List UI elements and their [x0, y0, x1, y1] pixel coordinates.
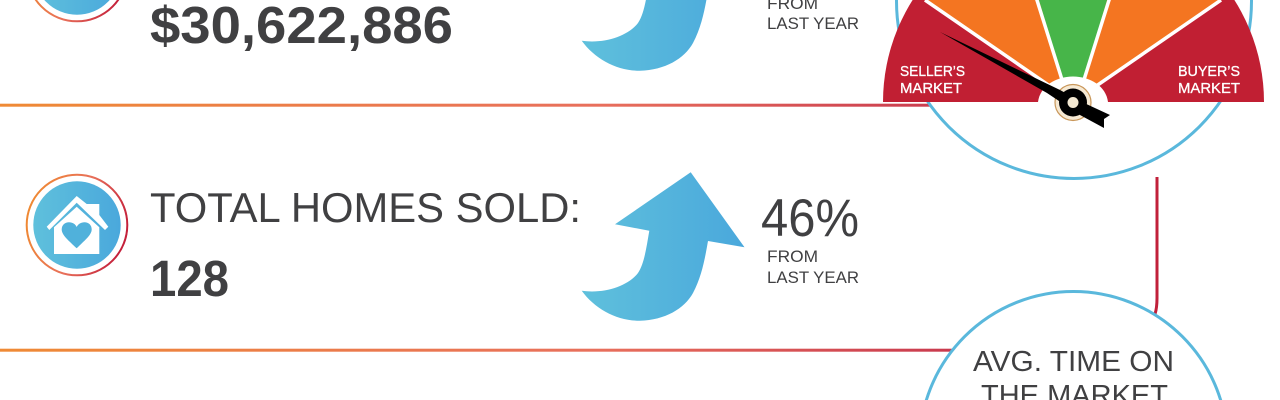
- arrow: sales volume up: [582, 0, 706, 71]
- heading: total homes sold label: TOTAL HOMES SOLD:: [150, 184, 581, 231]
- connector: gauge to time on market: [1155, 177, 1157, 314]
- gauge white hub: [1038, 76, 1108, 102]
- label: seller's market: MARKET: [900, 80, 962, 97]
- panel: market gauge: [883, 0, 1264, 178]
- label: buyer's market: [1179, 66, 1240, 94]
- label: seller's market: [900, 66, 965, 94]
- text: average time on market heading: AVG. TIME ON: [973, 346, 1174, 378]
- heading: total homes sold value: 128: [150, 250, 229, 307]
- label: buyer's market: BUYER’S: [1178, 63, 1240, 80]
- house body glyph: [54, 207, 99, 254]
- icon: sales volume badge: [34, 0, 120, 22]
- heart glyph: [62, 222, 92, 248]
- divider: upper row rule: [0, 104, 932, 107]
- arrow: homes sold up: [582, 172, 744, 321]
- roof glyph: [47, 196, 108, 230]
- gauge orange sectors: [928, 0, 1218, 84]
- panel: average time on market: [920, 292, 1228, 400]
- gauge white dividers: [924, 0, 1222, 86]
- text: homes sold from last year: [767, 247, 859, 287]
- gauge green sector: [1039, 0, 1107, 78]
- text: average time on market heading: [973, 346, 1174, 400]
- label: buyer's market: MARKET: [1178, 80, 1240, 97]
- gauge needle: [940, 32, 1110, 128]
- text: sales volume from last year: LAST YEAR: [767, 14, 859, 33]
- divider: lower row rule: [0, 349, 956, 352]
- gauge red sector: [883, 0, 1264, 102]
- stat: homes sold change: 46%: [761, 189, 859, 248]
- icon: homes sold badge: [27, 175, 127, 275]
- gauge outer circle: [896, 0, 1252, 178]
- text: homes sold from last year: FROM: [767, 247, 818, 266]
- text: sales volume from last year: [767, 0, 859, 33]
- text: homes sold from last year: LAST YEAR: [767, 268, 859, 287]
- label: seller's market: SELLER’S: [900, 63, 965, 80]
